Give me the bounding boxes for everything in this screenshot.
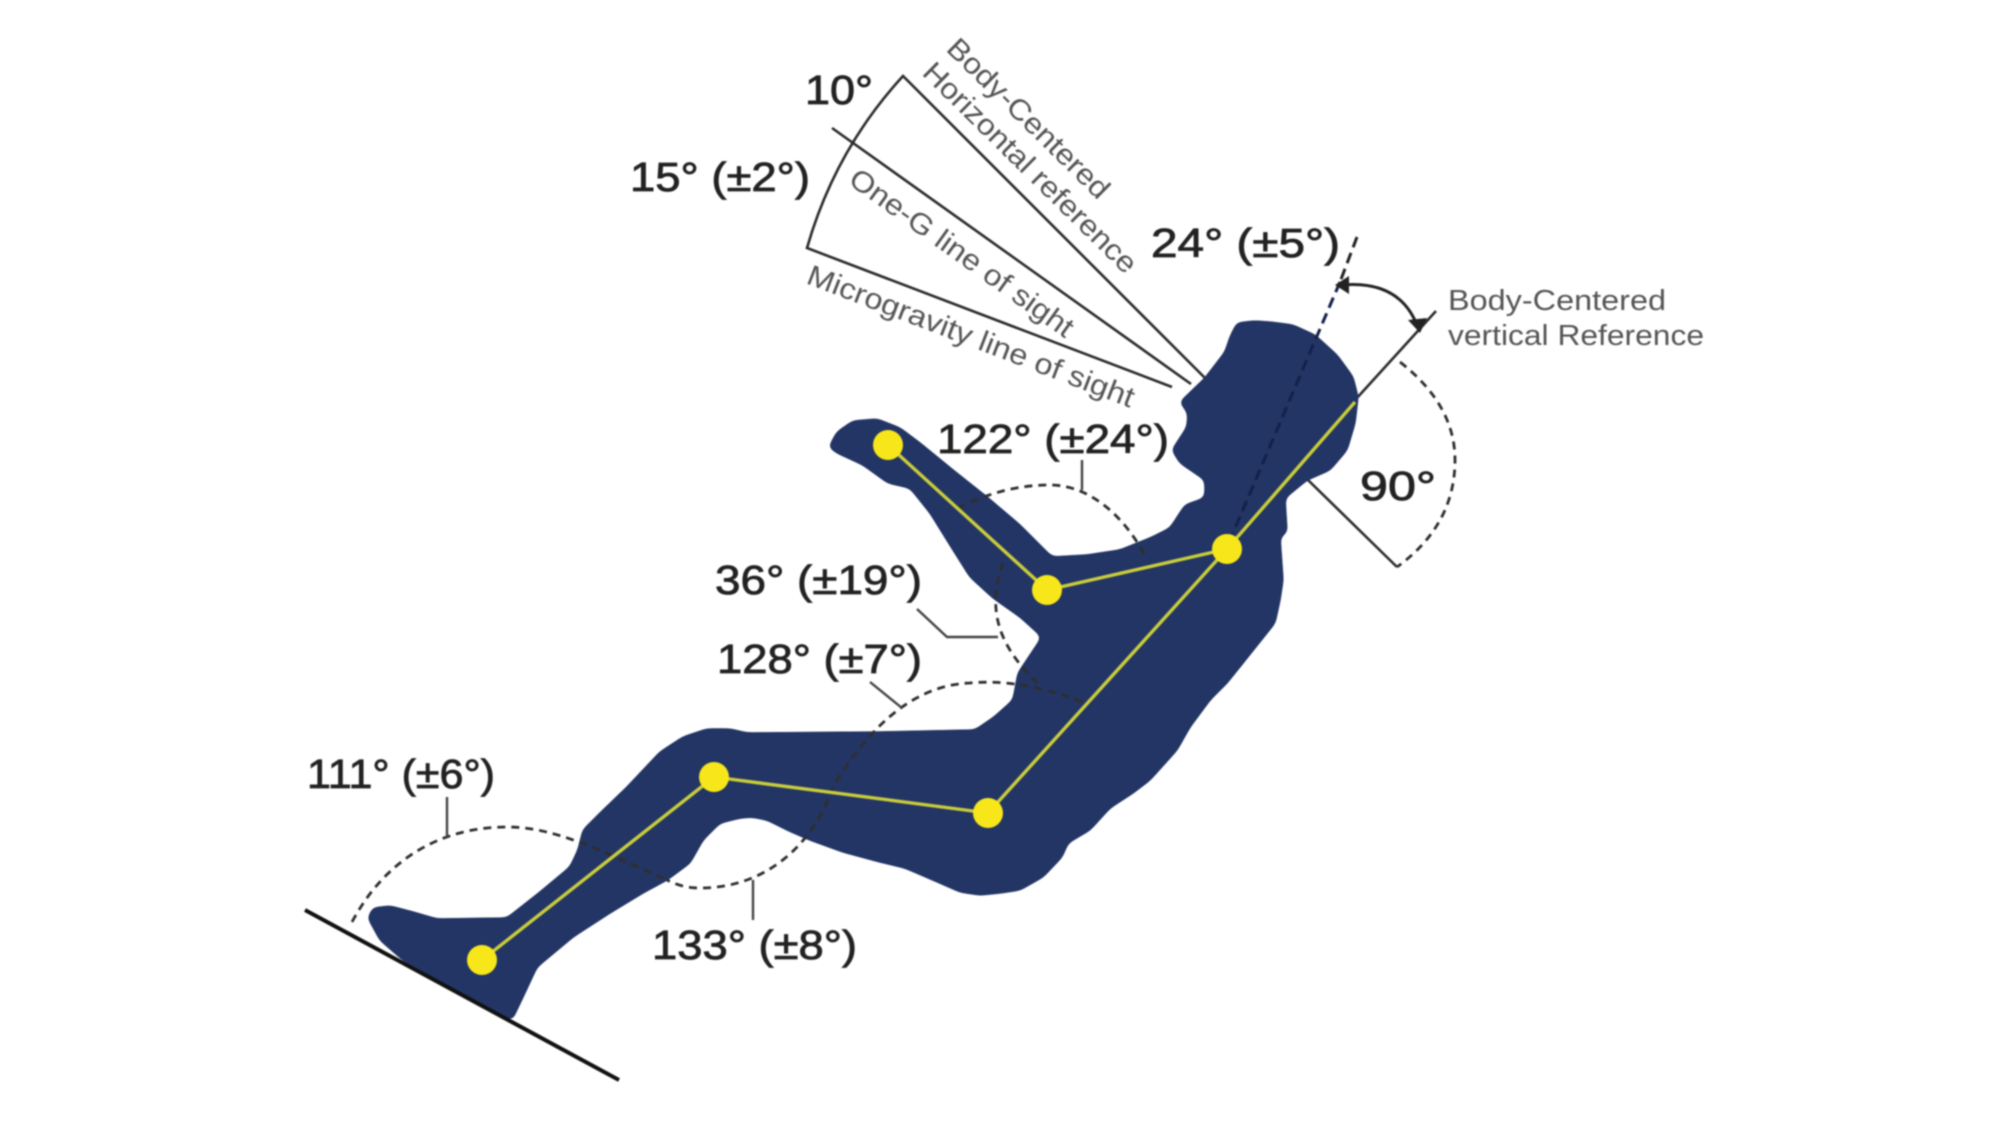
label: 111 degrees: 111° (±6°) bbox=[307, 751, 495, 797]
line of sight wedge bbox=[807, 76, 1207, 387]
arc: 128 and 133 degrees bbox=[667, 682, 1082, 888]
joint dots bbox=[467, 430, 1242, 975]
label: 24 degrees: 24° (±5°) bbox=[1151, 220, 1340, 266]
label: 122 degrees: 122° (±24°) bbox=[937, 416, 1169, 462]
label: body-centered horizontal: Body-Centered bbox=[940, 32, 1116, 206]
label: vertical reference second line: vertical Reference bbox=[1448, 320, 1704, 352]
label: 15 degrees: 15° (±2°) bbox=[630, 154, 810, 200]
label: microgravity line of sight: Microgravity line of sight bbox=[802, 260, 1139, 414]
reference labels bbox=[802, 32, 1704, 414]
label: 128 degrees: 128° (±7°) bbox=[717, 636, 922, 682]
dashed line through head bbox=[1233, 282, 1340, 533]
arc: 111 degrees bbox=[352, 827, 667, 922]
dashed body-centered line bbox=[1340, 237, 1357, 282]
angle labels bbox=[307, 67, 1436, 968]
label: 133 degrees: 133° (±8°) bbox=[652, 922, 857, 968]
label: body-centered vertical reference: Body-Centered bbox=[1448, 285, 1666, 317]
label: horizontal reference: Horizontal reference bbox=[916, 56, 1143, 280]
label: one-g line of sight: One-G line of sight bbox=[843, 163, 1080, 344]
skeleton lines bbox=[482, 402, 1355, 960]
body silhouette bbox=[368, 321, 1358, 1020]
dashed angle arcs bbox=[352, 362, 1455, 922]
label: 90 degrees: 90° bbox=[1360, 463, 1436, 509]
label: 10 degrees: 10° bbox=[805, 67, 873, 113]
leader lines bbox=[447, 460, 1082, 920]
arc: 36 degrees bbox=[996, 563, 1040, 685]
footplate line bbox=[305, 910, 619, 1080]
24 degree arrow arc bbox=[1335, 276, 1427, 333]
arc: 122 degrees bbox=[958, 485, 1146, 558]
label: 36 degrees: 36° (±19°) bbox=[715, 557, 922, 603]
reference lines: vertical and perpendicular bbox=[1308, 311, 1436, 567]
arc: 90 degrees bbox=[1397, 362, 1455, 567]
